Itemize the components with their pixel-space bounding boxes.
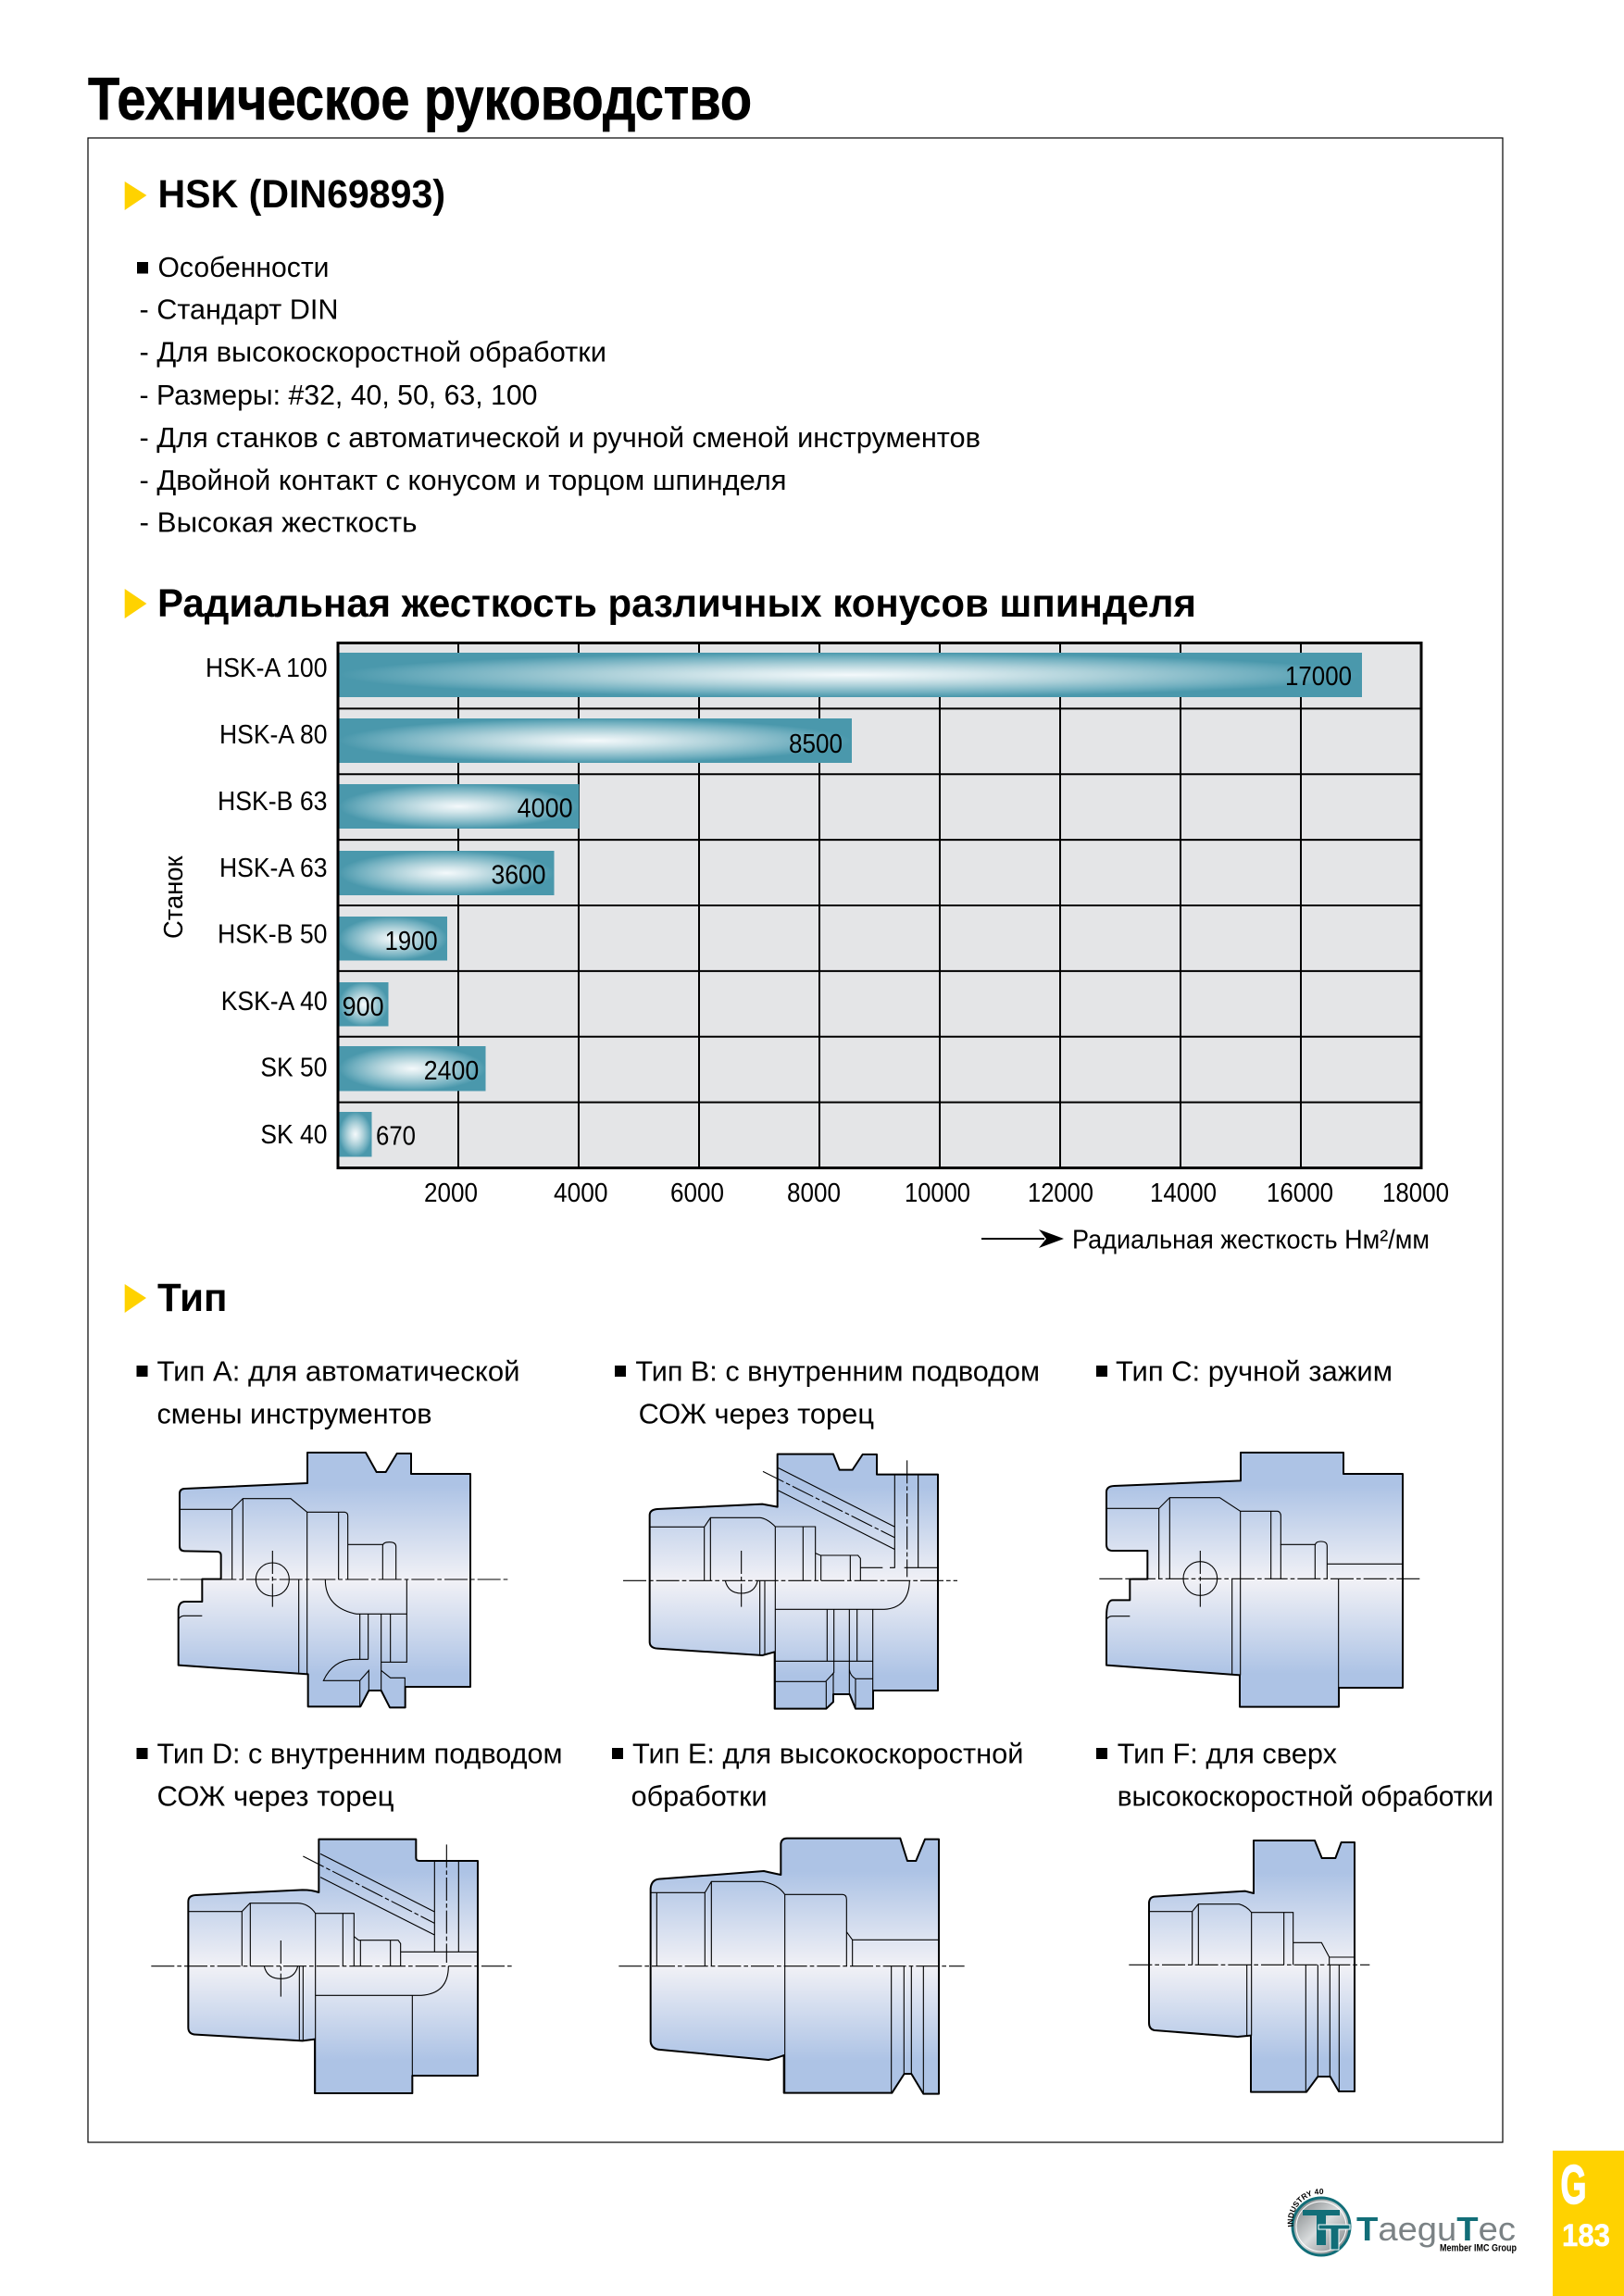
diagram: type F (1129, 1841, 1369, 2092)
logo: TaeguTec: INDUSTRY 40 (1287, 2189, 1324, 2227)
label: type A: Тип A: для автоматической (157, 1355, 520, 1388)
diagram: type C (1099, 1453, 1420, 1707)
title: Техническое руководство (88, 65, 752, 132)
label: type A (137, 1355, 520, 1430)
x axis ticks: 16000 (1267, 1179, 1333, 1208)
text block: features: - Высокая жесткость (139, 506, 417, 539)
page tab: G (1561, 2154, 1587, 2215)
text block: features: Особенности (157, 251, 330, 283)
category labels (206, 654, 328, 1150)
text block: features: - Для высокоскоростной обработки (139, 336, 606, 368)
label: type B: СОЖ через торец (639, 1398, 874, 1430)
label: type B (615, 1355, 1040, 1430)
category labels: KSK-A 40 (221, 987, 328, 1017)
logo: TaeguTec: TaeguTec (1356, 2210, 1516, 2248)
label: type C: Тип C: ручной зажим (1116, 1355, 1393, 1388)
category labels: HSK-B 63 (218, 787, 328, 817)
text block: features: - Стандарт DIN (139, 293, 339, 326)
bar values: 900 (343, 992, 384, 1022)
category labels: HSK-A 80 (219, 720, 328, 750)
heading: type: Тип (157, 1276, 228, 1320)
diagram: type E (618, 1839, 965, 2094)
bar values (343, 662, 1352, 1152)
heading: HSK: HSK (DIN69893) (157, 172, 445, 217)
x axis ticks: 12000 (1028, 1179, 1093, 1208)
bar values: 3600 (491, 861, 546, 891)
label: type F (1096, 1737, 1493, 1813)
text block: features (137, 251, 981, 539)
label: type D: Тип D: с внутренним подводом (157, 1737, 563, 1769)
text block: features: - Для станков с автоматической и ручной сменой инструментов (139, 421, 981, 454)
heading: radial stiffness: Радиальная жесткость различных конусов шпинделя (157, 581, 1196, 626)
x axis ticks: 18000 (1382, 1179, 1449, 1208)
bars (339, 653, 1362, 1157)
bar values: 2400 (424, 1056, 479, 1086)
category labels: SK 40 (260, 1120, 327, 1150)
label: type B: Тип B: с внутренним подводом (635, 1355, 1040, 1388)
label: type D: СОЖ через торец (157, 1780, 394, 1813)
x axis ticks (424, 1179, 1449, 1208)
page tab (1553, 2151, 1624, 2296)
x axis ticks: 2000 (424, 1179, 478, 1208)
label: type D (137, 1737, 563, 1813)
logo: TaeguTec (1287, 2189, 1517, 2257)
diagram: type A (147, 1453, 509, 1707)
bar values: 8500 (789, 730, 843, 759)
x axis ticks: 4000 (554, 1179, 607, 1208)
bar values: 1900 (385, 927, 438, 956)
label: type A: смены инструментов (157, 1398, 431, 1430)
diagram: type D (151, 1840, 512, 2093)
category labels: SK 50 (260, 1053, 327, 1082)
category labels: HSK-A 100 (206, 654, 328, 683)
diagram: type B (623, 1454, 957, 1709)
label: type F: высокоскоростной обработки (1118, 1780, 1493, 1813)
heading: type (125, 1276, 228, 1320)
bar values: 17000 (1285, 662, 1352, 692)
x axis ticks: 14000 (1150, 1179, 1217, 1208)
page tab: 183 (1562, 2218, 1610, 2253)
logo: TaeguTec: Member IMC Group (1440, 2243, 1517, 2254)
x axis title: Радиальная жесткость Нм²/мм (1072, 1226, 1430, 1255)
y axis title: Станок (159, 855, 189, 939)
x axis ticks: 10000 (905, 1179, 970, 1208)
category labels: HSK-B 50 (218, 920, 328, 950)
label: type E: Тип E: для высокоскоростной (632, 1737, 1024, 1769)
x axis ticks: 6000 (670, 1179, 724, 1208)
bar values: 670 (376, 1122, 416, 1152)
label: type F: Тип F: для сверх (1118, 1737, 1337, 1769)
label: type E (612, 1737, 1024, 1813)
bar values: 4000 (518, 794, 573, 824)
arrow (981, 1229, 1064, 1248)
text block: features: - Размеры: #32, 40, 50, 63, 100 (139, 379, 537, 411)
category labels: HSK-A 63 (219, 854, 328, 883)
text block: features: - Двойной контакт с конусом и торцом шпинделя (139, 464, 787, 496)
x axis ticks: 8000 (787, 1179, 841, 1208)
label: type E: обработки (631, 1780, 768, 1813)
panel: main frame (88, 138, 1503, 2142)
bar chart (159, 643, 1449, 1255)
